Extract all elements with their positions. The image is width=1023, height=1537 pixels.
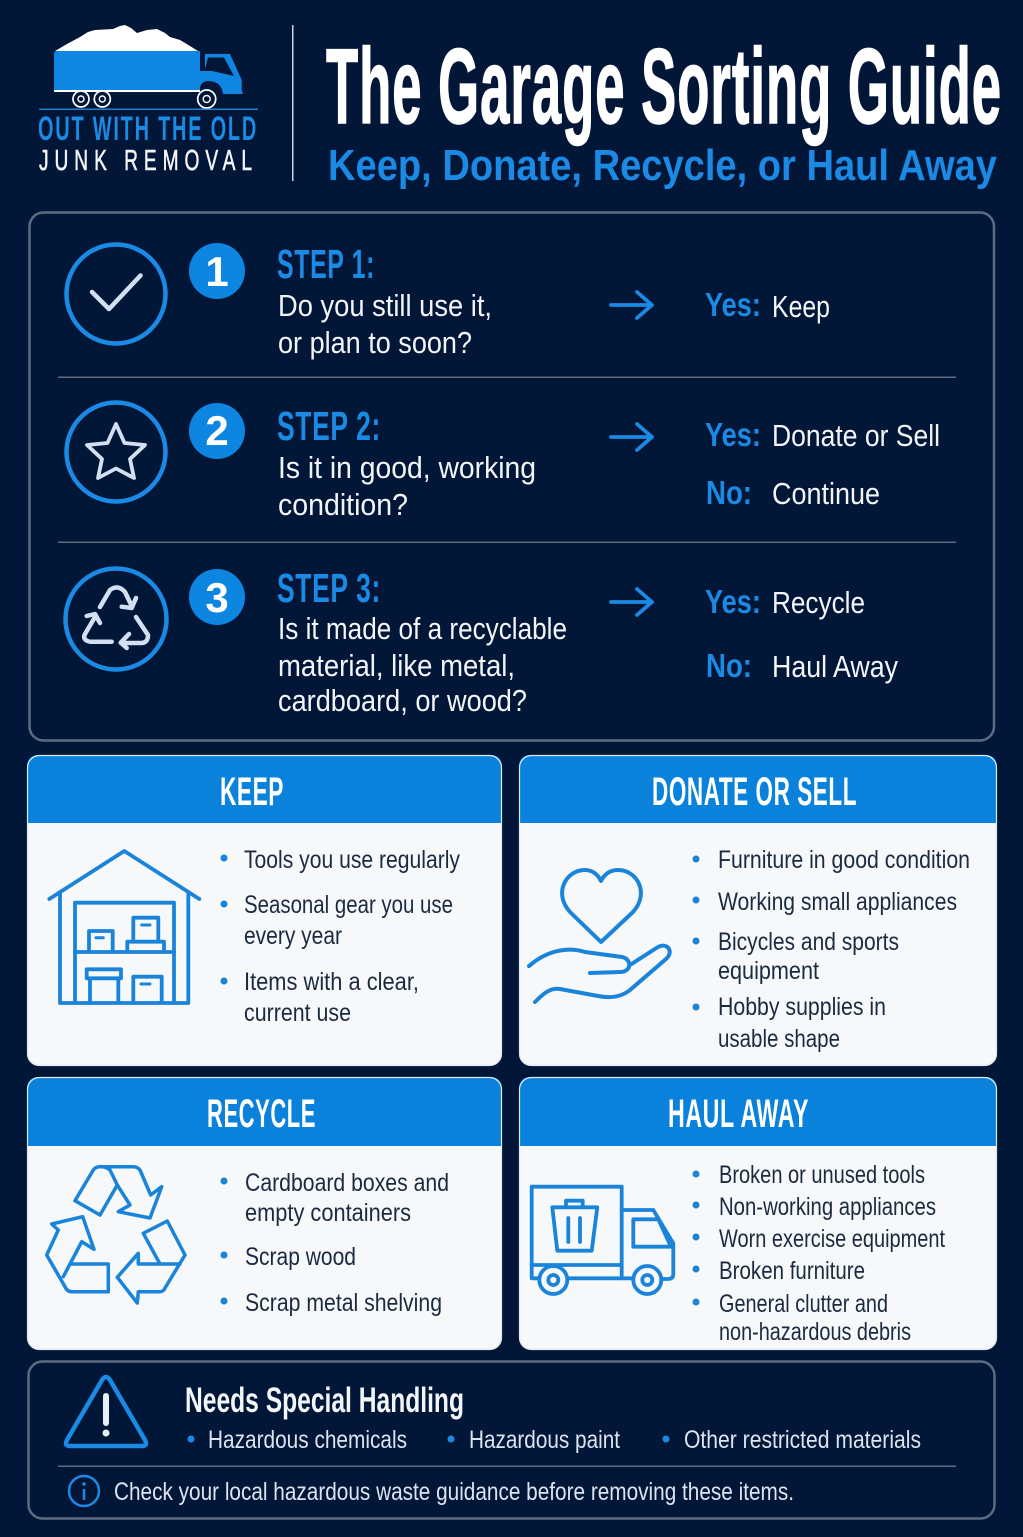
step 2 outcomes — [705, 416, 940, 511]
icon: recycling symbol — [47, 1167, 185, 1303]
donate list: Bicycles and sports — [718, 928, 899, 956]
keep list: current use — [244, 999, 351, 1027]
donate heading: DONATE OR SELL — [652, 770, 857, 814]
arrow — [611, 424, 652, 450]
step 1 question — [278, 288, 492, 360]
number badge 1: 1 — [205, 248, 229, 295]
guidance note: Check your local hazardous waste guidance before removing these items. — [114, 1478, 794, 1506]
donate list: Working small appliances — [718, 888, 957, 916]
number badge 1 — [189, 243, 245, 299]
logo tagline: JUNK REMOVAL — [39, 145, 258, 177]
step 1 heading: STEP 1: — [277, 241, 375, 287]
panel: keep — [27, 755, 502, 1066]
icon: garbage truck — [532, 1187, 673, 1294]
hazardous items list — [188, 1426, 921, 1454]
donate list: Hobby supplies in — [718, 993, 886, 1021]
step 1 outcome — [705, 286, 830, 324]
icon: warning triangle — [66, 1377, 146, 1446]
donate list — [692, 846, 970, 1053]
step 1 question: or plan to soon? — [278, 325, 472, 360]
recycle list — [220, 1169, 449, 1317]
icon: heart in hand — [529, 870, 670, 1002]
icon: junk truck — [39, 25, 258, 110]
step 2 — [66, 402, 940, 522]
donate list: equipment — [718, 957, 819, 985]
hazardous items list: Hazardous chemicals — [208, 1426, 407, 1454]
step 2 question: condition? — [278, 487, 408, 522]
arrow — [611, 589, 652, 615]
step 1 outcome: Keep — [772, 289, 830, 324]
haul away list: General clutter and — [719, 1290, 888, 1318]
keep list: Tools you use regularly — [244, 846, 460, 874]
step 2 question — [278, 450, 536, 522]
step 3 heading: STEP 3: — [277, 565, 381, 611]
step 1 question: Do you still use it, — [278, 288, 492, 323]
hazardous items list: Hazardous paint — [469, 1426, 620, 1454]
step 3 outcomes: Recycle — [772, 585, 865, 620]
donate list: usable shape — [718, 1025, 840, 1053]
haul away list: Non-working appliances — [719, 1193, 936, 1221]
keep list: Items with a clear, — [244, 968, 419, 996]
haul away list: Broken or unused tools — [719, 1161, 925, 1189]
keep heading: KEEP — [220, 770, 284, 814]
recycle heading: RECYCLE — [207, 1092, 316, 1136]
recycle list: empty containers — [245, 1199, 411, 1227]
icon: garage with boxes — [49, 851, 199, 1003]
hazardous items list: Other restricted materials — [684, 1426, 921, 1454]
step 2 outcomes: Yes: — [705, 416, 761, 453]
panel: needs special handling — [28, 1362, 994, 1518]
haul away list: non-hazardous debris — [719, 1318, 911, 1346]
arrow — [611, 292, 652, 318]
step 1 outcome: Yes: — [705, 286, 761, 323]
panel: haul away — [519, 1077, 997, 1350]
step 3 outcomes: Yes: — [705, 583, 761, 620]
icon: star — [66, 402, 166, 502]
step 3 outcomes — [705, 583, 898, 684]
logo name: OUT WITH THE OLD — [38, 110, 258, 148]
haul away list — [692, 1161, 945, 1346]
panel: three-step decision flow — [30, 212, 994, 740]
step 1 — [66, 241, 830, 360]
step 2 question: Is it in good, working — [278, 450, 536, 485]
recycle list: Scrap wood — [245, 1243, 356, 1271]
panel: donate or sell — [519, 755, 997, 1066]
haul away list: Worn exercise equipment — [719, 1225, 945, 1253]
step 3 — [66, 565, 898, 718]
step 2 outcomes: Donate or Sell — [772, 418, 940, 453]
step 3 outcomes: Haul Away — [772, 649, 898, 684]
step 2 outcomes: No: — [706, 474, 752, 511]
panel: recycle — [27, 1077, 502, 1350]
recycle list: Cardboard boxes and — [245, 1169, 449, 1197]
special handling heading: Needs Special Handling — [185, 1381, 464, 1420]
keep list: every year — [244, 922, 342, 950]
number badge 2 — [189, 403, 245, 459]
icon: check mark — [66, 244, 166, 344]
keep list: Seasonal gear you use — [244, 891, 453, 919]
haul away list: Broken furniture — [719, 1257, 865, 1285]
icon: info — [69, 1476, 99, 1506]
keep list — [220, 846, 460, 1027]
step 3 question — [278, 611, 567, 718]
logo: Out With The Old Junk Removal — [38, 25, 258, 177]
step 3 question: material, like metal, — [278, 648, 515, 683]
icon: recycle loop — [66, 568, 166, 670]
recycle list: Scrap metal shelving — [245, 1289, 442, 1317]
haul away heading: HAUL AWAY — [668, 1092, 809, 1136]
number badge 3 — [189, 569, 245, 625]
step 3 question: cardboard, or wood? — [278, 683, 527, 718]
step 2 heading: STEP 2: — [277, 403, 381, 449]
number badge 2: 2 — [205, 407, 229, 454]
step 3 question: Is it made of a recyclable — [278, 611, 567, 646]
donate list: Furniture in good condition — [718, 846, 970, 874]
step 3 outcomes: No: — [706, 647, 752, 684]
step 2 outcomes: Continue — [772, 476, 880, 511]
number badge 3: 3 — [205, 574, 229, 621]
